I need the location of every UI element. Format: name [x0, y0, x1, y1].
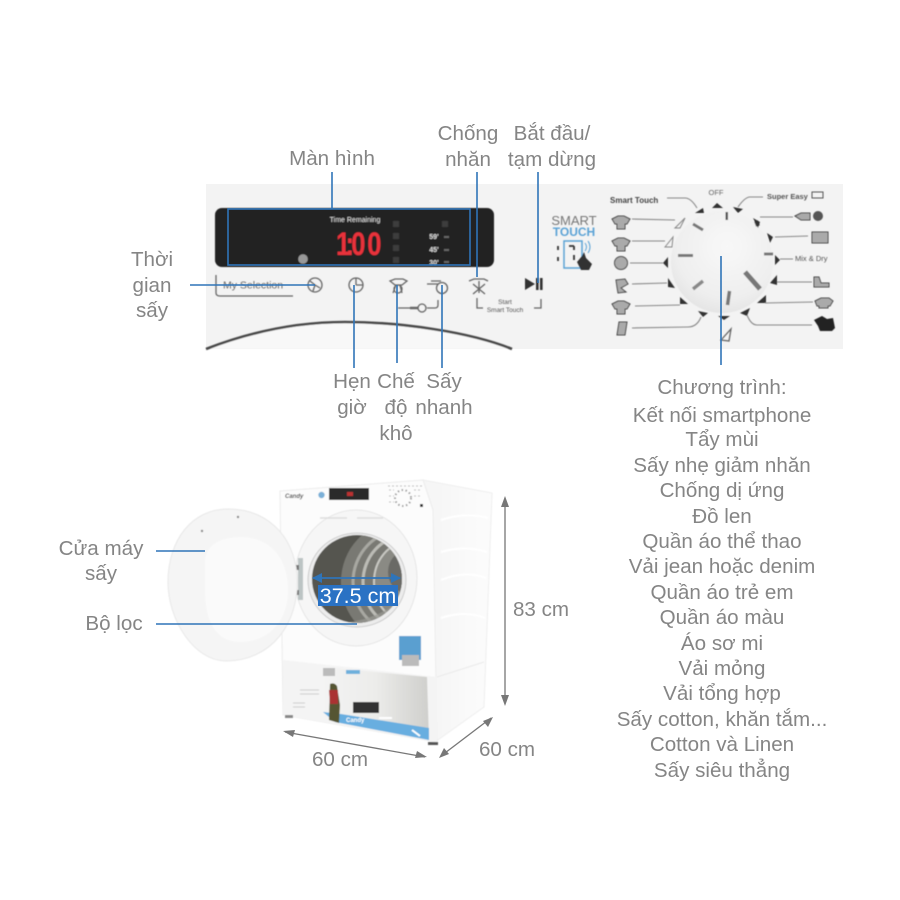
display screen: 45' [429, 247, 439, 254]
icon: key lock [398, 300, 438, 312]
icon: fast dry [427, 281, 448, 294]
display screen [215, 208, 494, 267]
start smart touch label [477, 298, 541, 314]
drum opening [296, 510, 418, 646]
leader: door and filter [156, 551, 357, 624]
my selection label [216, 275, 293, 296]
display screen: 1:00 [336, 227, 381, 263]
label: 60 cm depth: 60 cm [479, 738, 535, 761]
dial labels: Mix & Dry [795, 254, 828, 263]
display screen: 59' [429, 234, 439, 241]
list: programs: Vải jean hoặc denim [629, 555, 815, 578]
label: Cửa máy sấy: sấy [85, 562, 118, 585]
label: Thời gian sấy: gian [133, 274, 171, 297]
energy label [399, 636, 421, 666]
leader lines [190, 172, 721, 368]
label: 83 cm: 83 cm [513, 598, 569, 621]
list: programs: Quần áo màu [660, 606, 784, 629]
feet [285, 715, 438, 745]
label: Cửa máy sấy: Cửa máy [59, 537, 143, 560]
arrow: width [283, 730, 427, 758]
label: 60 cm width: 60 cm [312, 748, 368, 771]
list: programs: Sấy cotton, khăn tắm... [617, 708, 827, 731]
label: Màn hình: Màn hình [289, 147, 375, 170]
list: programs: Chống dị ứng [660, 479, 784, 502]
side panel [423, 480, 492, 742]
arrow: height [501, 496, 509, 706]
door [168, 509, 297, 661]
label: Chống nhăn: Chống [438, 122, 498, 145]
panel: control panel [206, 184, 843, 349]
list: programs [617, 376, 827, 782]
list: programs: Kết nối smartphone [633, 404, 811, 427]
label: Thời gian sấy: Thời [131, 248, 173, 271]
dryer machine [168, 480, 492, 745]
control strip [285, 486, 423, 507]
icon: anti crease [469, 279, 488, 294]
label: Chế độ khô: độ [385, 396, 407, 419]
label: Hẹn giờ: giờ [337, 396, 367, 419]
icon: dryness [390, 279, 407, 293]
measurement: drum diameter: 37.5 cm [320, 584, 396, 608]
measurement: drum diameter [312, 573, 401, 608]
dial markers and leader lines [630, 197, 813, 328]
base sticker: Candy [346, 718, 365, 724]
arrow: depth [439, 717, 493, 758]
dial labels [610, 188, 828, 263]
list: programs: Vải tổng hợp [663, 682, 781, 705]
list: programs: Chương trình: [657, 376, 787, 399]
list: programs: Sấy siêu thẳng [654, 758, 790, 782]
label: Bắt đầu / tạm dừng: tạm dừng [508, 148, 596, 171]
control strip: Candy [285, 494, 304, 500]
list: programs: Quần áo thể thao [642, 530, 802, 553]
list: programs: Đồ len [692, 505, 752, 528]
base [283, 660, 437, 742]
program icons left [612, 216, 630, 335]
label: Chế độ khô: Chế [377, 370, 415, 393]
label: Hẹn giờ: Hẹn [333, 370, 371, 393]
dial [671, 211, 773, 313]
label: Sấy nhanh: Sấy [426, 370, 462, 393]
list: programs: Vải mỏng [678, 657, 766, 680]
icon: selection [308, 278, 322, 292]
label: Chế độ khô: khô [379, 422, 413, 445]
start smart touch label: Start [498, 299, 512, 306]
icon: play pause [525, 278, 543, 290]
base sticker [293, 667, 429, 740]
icon: timer [349, 278, 363, 292]
list: programs: Cotton và Linen [650, 733, 794, 756]
label: Thời gian sấy: sấy [136, 299, 169, 322]
list: programs: Quần áo trẻ em [650, 581, 794, 604]
smart touch logo: TOUCH [553, 225, 595, 239]
dial labels: Smart Touch [610, 196, 658, 205]
list: programs: Tẩy mùi [685, 428, 759, 451]
my selection label: My Selection [223, 280, 283, 292]
smart touch logo [551, 213, 597, 270]
label: Sấy nhanh: nhanh [415, 396, 473, 419]
dial labels: Super Easy [767, 192, 809, 201]
label: Bộ lọc: Bộ lọc [85, 612, 143, 635]
front panel [280, 480, 437, 742]
display screen: Time Remaining [330, 217, 380, 224]
hinges [291, 558, 303, 600]
list: programs: Áo sơ mi [681, 632, 763, 655]
smart touch logo: SMART [551, 213, 597, 228]
list: programs: Sấy nhẹ giảm nhăn [633, 454, 811, 477]
label: Bắt đầu / tạm dừng: Bắt đầu/ [514, 122, 590, 145]
curved door edge [206, 322, 512, 349]
start smart touch label: Smart Touch [487, 307, 524, 314]
display screen: 30' [429, 260, 439, 267]
program icons right [721, 192, 835, 341]
screen highlight frame [228, 209, 470, 265]
dial labels: OFF [708, 188, 724, 197]
label: Chống nhăn: nhăn [445, 148, 491, 171]
